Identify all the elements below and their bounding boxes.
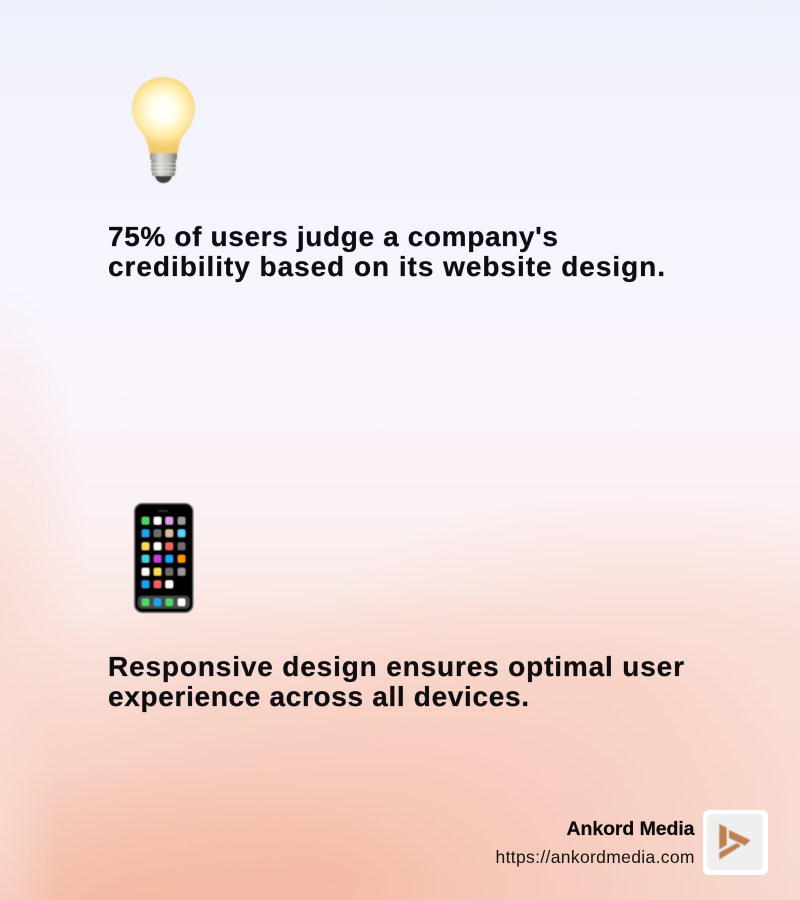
heading: credibility fact: credibility based on its website design. — [108, 251, 665, 282]
heading: responsive design fact: experience across all devices. — [108, 681, 529, 712]
heading: responsive design fact — [108, 651, 684, 712]
icon: smartphone — [134, 504, 193, 612]
heading: credibility fact — [108, 221, 665, 282]
heading: credibility fact: 75% of users judge a company's — [108, 221, 558, 252]
heading: responsive design fact: Responsive design ensures optimal user — [108, 651, 684, 682]
icon: light bulb — [132, 77, 195, 183]
brand url: https://ankordmedia.com — [496, 847, 694, 867]
logo — [703, 810, 768, 875]
brand name: Ankord Media — [566, 818, 695, 840]
